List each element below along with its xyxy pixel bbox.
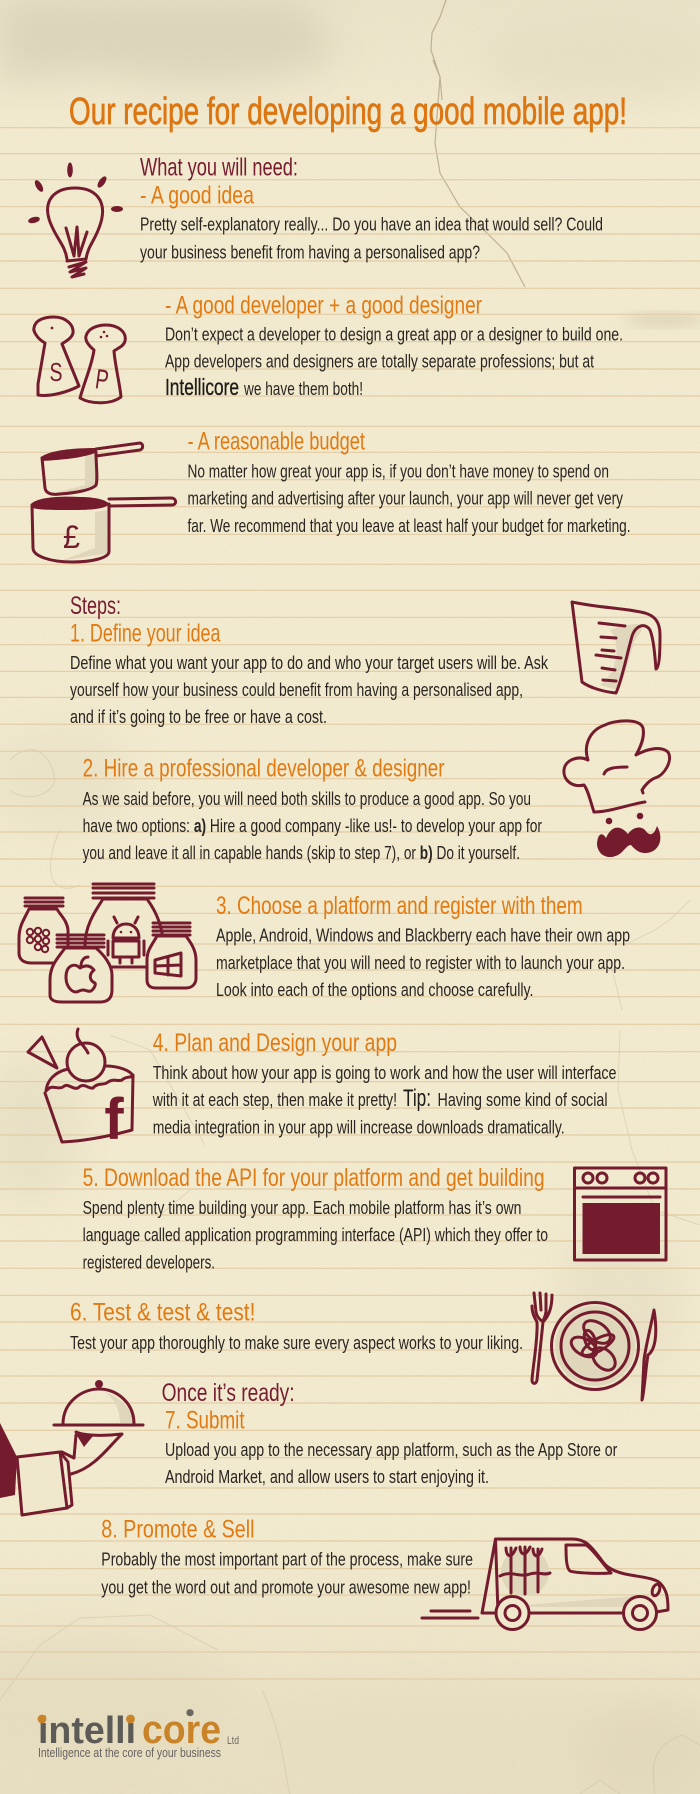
icon: chef hat and moustache <box>564 721 670 857</box>
section: step 6 <box>70 1299 523 1353</box>
text: step 5 body: language called application programming interface (API) which they offer to <box>83 1224 548 1245</box>
text: step 1 body: and if it’s going to be free or have a cost. <box>70 706 327 727</box>
icon: light bulb <box>27 162 123 277</box>
text: step 2 body: have two options: a) Hire a good company -like us!- to develop your app for <box>83 815 542 836</box>
text: step 1 body: Define what you want your app to do and who your target users will be. Ask <box>70 652 549 673</box>
text: step 1 body <box>70 652 549 727</box>
section: step 8 <box>101 1515 473 1597</box>
text: step 5 body: registered developers. <box>83 1251 215 1272</box>
heading: once it's ready: Once it’s ready: <box>162 1379 295 1407</box>
section: step 4 <box>152 1029 616 1137</box>
text: step 1 body: yourself how your business could benefit from having a personalised app, <box>70 679 523 700</box>
text: budget body <box>188 460 630 536</box>
icon: waiter hand with cloche <box>0 1380 143 1515</box>
icon: saucepans with pound sign: £ <box>63 519 80 555</box>
icon: salt and pepper shakers: S <box>50 357 62 387</box>
icon: oven <box>574 1168 666 1260</box>
heading: what you will need: What you will need: <box>140 154 298 182</box>
subheading: step 4: 4. Plan and Design your app <box>153 1029 397 1057</box>
text: step 4 body: Tip: <box>403 1085 431 1112</box>
section: step 2 <box>83 755 542 863</box>
icon: cupcake with f logo: f <box>104 1087 124 1152</box>
icon: cupcake with f logo <box>28 1029 133 1152</box>
section: step 5 <box>83 1164 548 1272</box>
jar: apple <box>50 935 112 1002</box>
subheading: step 1: 1. Define your idea <box>70 620 221 648</box>
text: step 3 body: Look into each of the options and choose carefully. <box>216 979 534 1000</box>
text: step 4 body: Having some kind of social <box>438 1089 608 1110</box>
subheading: step 2: 2. Hire a professional developer & designer <box>83 755 445 783</box>
text: step 8 body <box>101 1549 473 1597</box>
subheading: step 5: 5. Download the API for your platform and get building <box>83 1164 545 1192</box>
subheading: a good idea: - A good idea <box>140 181 254 209</box>
jar: blackberry <box>19 898 68 963</box>
subheading: reasonable budget: - A reasonable budget <box>188 427 365 455</box>
text: step 5 body <box>83 1197 548 1272</box>
section: developer and designer <box>165 291 623 400</box>
icon: measuring jug <box>572 602 660 693</box>
icon: saucepans with pound sign <box>31 443 176 562</box>
text: step 8 body: Probably the most important part of the process, make sure <box>101 1549 473 1570</box>
text: step 4 body: with it at each step, then make it pretty! <box>152 1089 397 1110</box>
section: step 3 <box>216 892 630 1000</box>
subheading: step 8: 8. Promote & Sell <box>101 1515 254 1543</box>
section: step 7 <box>162 1379 617 1487</box>
icon: salt and pepper shakers <box>34 317 125 403</box>
jar: android <box>85 884 163 967</box>
text: step 4 body: media integration in your app will increase downloads dramatically. <box>153 1116 565 1137</box>
text: step 4 body <box>152 1062 616 1137</box>
section: step 1 <box>70 592 549 727</box>
text: step 2 body <box>83 788 542 863</box>
text: developer and designer body: Intellicore <box>165 374 239 400</box>
jar: windows <box>147 923 196 988</box>
text: step 6 body: Test your app thoroughly to make sure every aspect works to your liking. <box>70 1332 523 1353</box>
logo: intellicore: core <box>142 1708 221 1752</box>
text: step 8 body: you get the word out and promote your awesome new app! <box>101 1576 471 1597</box>
icon: plate with fork and knife <box>532 1293 656 1400</box>
icon: delivery van <box>422 1539 668 1630</box>
subheading: step 7: 7. Submit <box>165 1407 245 1435</box>
text: step 7 body <box>165 1439 617 1487</box>
subheading: step 6: 6. Test & test & test! <box>70 1299 255 1327</box>
text: step 5 body: Spend plenty time building your app. Each mobile platform has it’s own <box>83 1197 521 1218</box>
logo: intellicore <box>38 1708 239 1760</box>
logo: intellicore: Ltd <box>227 1735 239 1747</box>
logo: intellicore: Intelligence at the core of your business <box>38 1745 221 1760</box>
text: step 3 body <box>216 925 630 1000</box>
text: step 7 body: Android Market, and allow users to start enjoying it. <box>165 1466 489 1487</box>
logo: intellicore: intelli <box>38 1710 136 1752</box>
heading: steps: Steps: <box>70 592 121 620</box>
text: step 2 body: you and leave it all in capable hands (skip to step 7), or b) Do it yourself. <box>83 842 520 863</box>
text: developer and designer body: we have them both! <box>243 378 363 399</box>
subheading: developer and designer: - A good developer + a good designer <box>165 291 482 319</box>
subheading: step 3: 3. Choose a platform and register with them <box>216 892 583 920</box>
section: a good idea <box>140 154 603 262</box>
section: a reasonable budget <box>188 427 630 536</box>
text: step 2 body: As we said before, you will need both skills to produce a good app. So you <box>83 788 531 809</box>
text: a good idea body <box>140 214 603 262</box>
icon: salt and pepper shakers: P <box>93 363 111 396</box>
text: a good idea body: your business benefit from having a personalised app? <box>140 241 480 262</box>
icon: app jars <box>19 884 196 1002</box>
text: developer and designer body <box>165 324 623 400</box>
